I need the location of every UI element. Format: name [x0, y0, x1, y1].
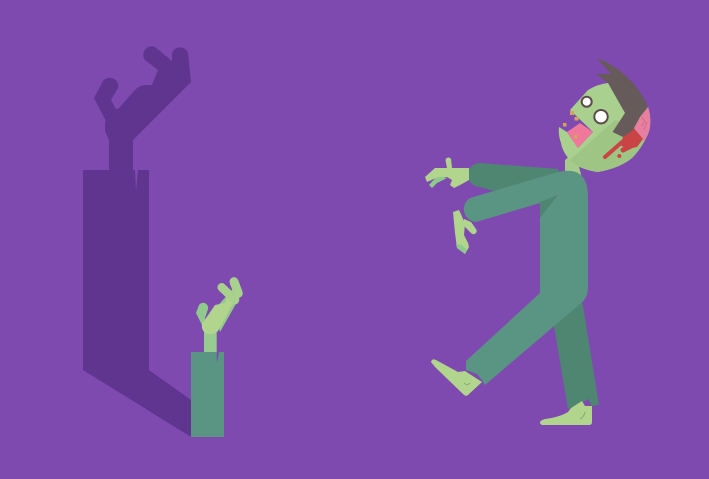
darker lower head: [570, 120, 650, 172]
head shape: [559, 83, 650, 172]
eye large: [594, 110, 608, 123]
zombie figure: [425, 58, 650, 425]
front hand: [453, 210, 477, 254]
blood: [602, 127, 643, 160]
sleeve: [191, 352, 224, 437]
mouth: [567, 123, 593, 148]
sleeve shadow: [540, 195, 558, 218]
brain: [633, 107, 650, 140]
palm: [202, 297, 235, 334]
neck: [565, 152, 582, 178]
back arm sleeve: [468, 163, 560, 192]
hair: [596, 58, 648, 137]
finger two: [228, 276, 244, 299]
torso, front sleeve and front leg: [464, 171, 588, 385]
eye small: [582, 97, 592, 107]
back foot: [540, 401, 592, 425]
forearm: [204, 328, 217, 353]
shadow of arm: [83, 46, 191, 437]
head: [559, 58, 650, 172]
back of fingers: [214, 283, 241, 332]
thumb: [196, 303, 208, 328]
front foot: [431, 359, 482, 396]
back leg: [553, 300, 599, 409]
teeth: [563, 111, 578, 138]
back hand: [425, 158, 469, 188]
finger one: [216, 281, 241, 306]
arm rising from sleeve: [191, 276, 244, 437]
